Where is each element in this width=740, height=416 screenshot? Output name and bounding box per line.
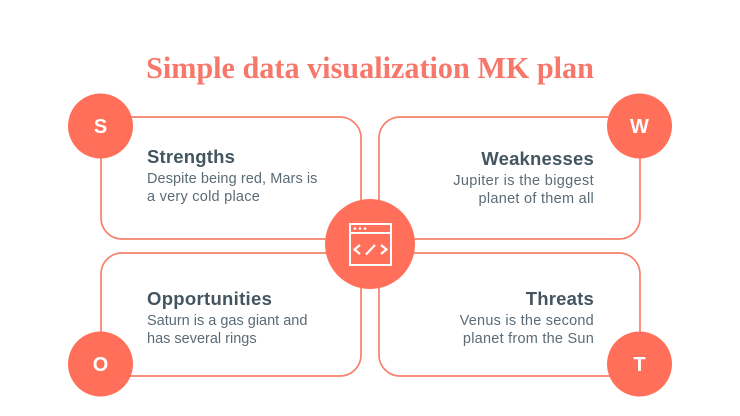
text block: threats: Threats	[526, 288, 594, 309]
text block: strengths	[147, 146, 318, 204]
text block: threats	[460, 288, 594, 346]
panel outline: strengths	[101, 117, 361, 239]
text block: threats: Venus is the second	[460, 312, 594, 328]
text block: strengths: a very cold place	[147, 188, 260, 204]
text block: weaknesses: Jupiter is the biggest	[453, 172, 594, 188]
panel outline: weaknesses	[379, 117, 640, 239]
badge: W	[607, 94, 672, 158]
panel outline: opportunities	[101, 253, 361, 376]
center circle with code window icon	[325, 199, 415, 289]
text block: weaknesses: planet of them all	[479, 190, 594, 206]
badge: O	[68, 332, 133, 396]
panel outline: threats	[379, 253, 640, 376]
text block: weaknesses: Weaknesses	[481, 148, 594, 169]
text block: weaknesses	[453, 148, 594, 206]
badge: T: T	[633, 354, 646, 376]
badge: O: O	[93, 354, 108, 376]
badge: W: W	[630, 116, 649, 138]
badge: T	[607, 332, 672, 396]
badge: S	[68, 94, 133, 158]
text block: opportunities	[147, 288, 307, 346]
text block: strengths: Despite being red, Mars is	[147, 170, 318, 186]
badge: S: S	[94, 116, 107, 138]
text block: opportunities: has several rings	[147, 330, 257, 346]
text block: strengths: Strengths	[147, 146, 235, 167]
text block: opportunities: Opportunities	[147, 288, 272, 309]
text block: opportunities: Saturn is a gas giant and	[147, 312, 307, 328]
title: Simple data visualization MK plan	[146, 50, 594, 84]
text block: threats: planet from the Sun	[463, 330, 594, 346]
